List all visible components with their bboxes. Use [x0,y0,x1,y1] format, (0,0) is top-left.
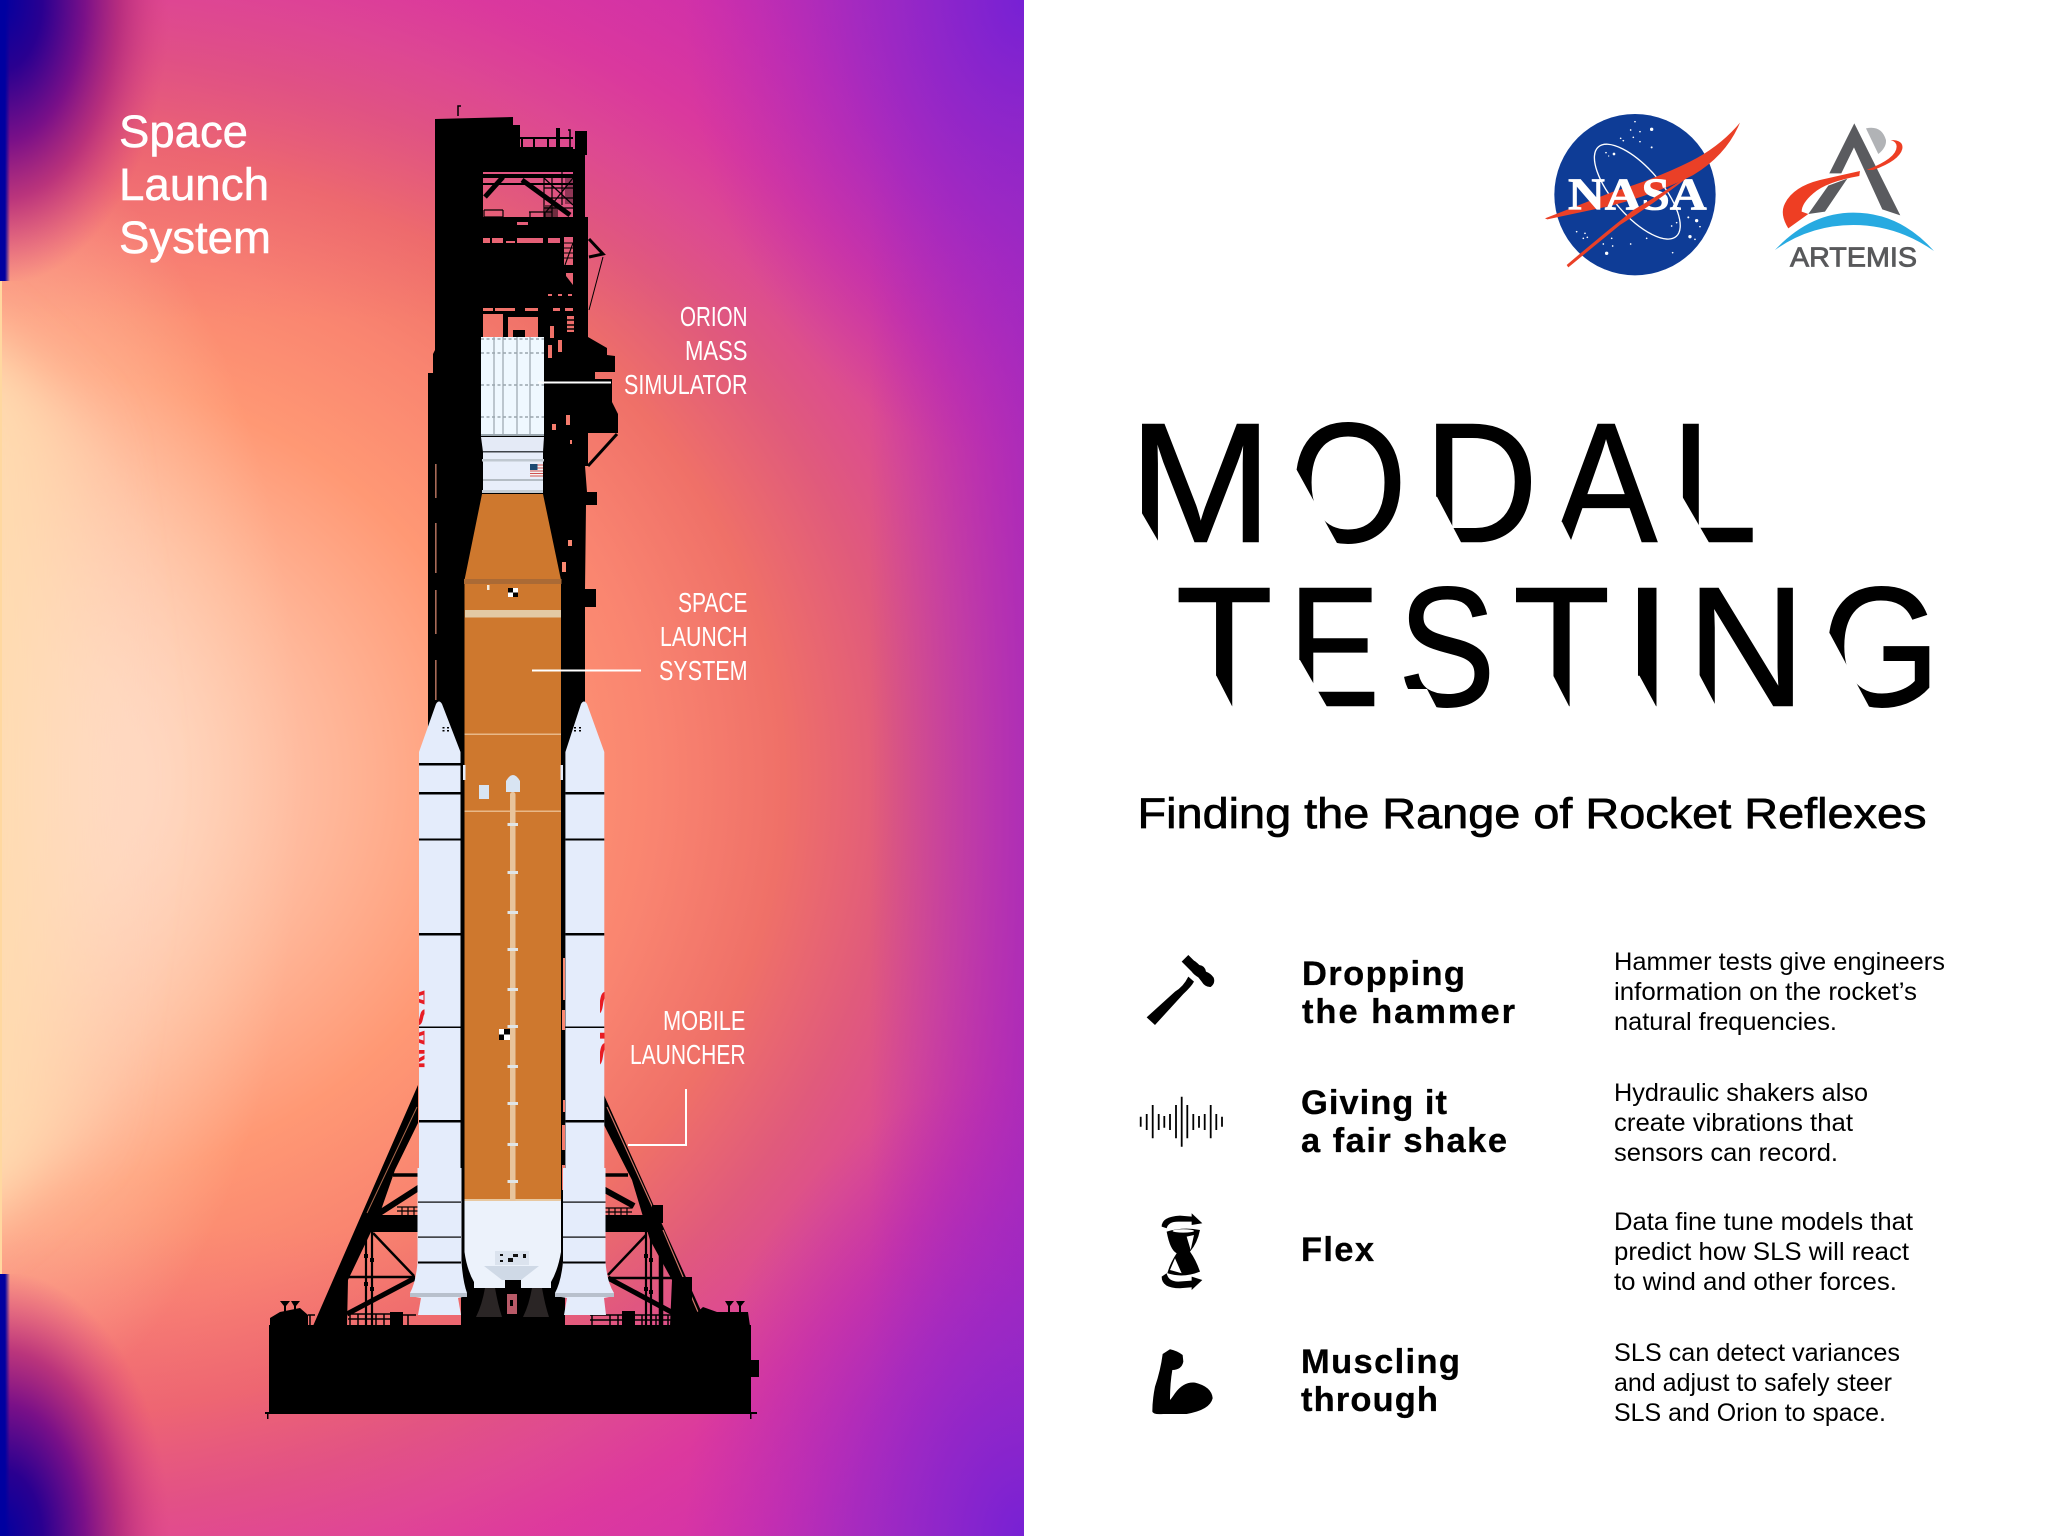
label: Mobile launcher: LAUNCHER [630,1039,746,1070]
text: hammer tests: Hammer tests give engineers [1614,948,1945,976]
icon: flexed arm [1152,1349,1213,1414]
title: TESTING: T [1513,551,1610,742]
text: SLS can detect: and adjust to safely steer [1614,1369,1892,1397]
heading: Space Launch System: System [119,212,271,263]
text: hydraulic shakers: Hydraulic shakers also [1614,1079,1868,1107]
US flag [530,464,543,477]
text: SLS can detect: SLS can detect variances [1614,1339,1900,1367]
icon: hammer [1147,955,1214,1025]
heading: Muscling through [1301,1343,1460,1419]
heading: Space Launch System [119,106,271,263]
heading: Muscling through: through [1301,1381,1438,1419]
title: TESTING: E [1289,552,1380,742]
subtitle: Finding the Range of Rocket Reflexes [1138,790,1926,838]
title: MODAL: L [1671,389,1757,578]
icon: twisting hourglass [1162,1213,1202,1290]
logo: Artemis: ARTEMIS [1790,242,1917,273]
rocket: left solid booster [406,702,467,1315]
heading: Flex: Flex [1301,1231,1374,1269]
title: MODAL: A [1555,388,1657,578]
logo: Artemis [1775,123,1934,273]
title: TESTING: N [1687,553,1805,742]
label: Space Launch System: SYSTEM [659,655,748,686]
icon: sound wave [1141,1097,1222,1147]
title cuts: TESTING [1200,633,1873,714]
label: Space Launch System: SPACE [678,587,748,618]
title cuts: MODAL [1135,470,1711,546]
logo: NASA [1545,114,1740,275]
text: hammer tests: information on the rocket’s [1614,978,1917,1006]
label: Orion mass simulator: SIMULATOR [624,369,748,400]
booster lettering: NASA [406,987,439,1069]
label: Space Launch System [532,587,748,686]
launcher base platform [265,1270,759,1419]
rocket: core stage [463,494,563,1317]
heading: Dropping the hammer: the hammer [1302,993,1515,1031]
heading: Dropping the hammer: Dropping [1302,955,1465,993]
title: TESTING: G [1822,553,1940,742]
title: MODAL: D [1424,388,1538,578]
title: MODAL [1129,388,1757,579]
heading: Dropping the hammer [1302,955,1515,1031]
title: TESTING [1176,551,1940,742]
title: MODAL: M [1129,388,1272,578]
label: Mobile launcher [628,1005,746,1145]
booster lettering: SLS [586,990,619,1068]
heading: Space Launch System: Space [119,106,248,157]
launcher truss right [603,1095,706,1326]
text: hammer tests: natural frequencies. [1614,1008,1837,1036]
heading: Muscling through: Muscling [1301,1343,1460,1381]
label: Mobile launcher: MOBILE [663,1005,746,1036]
text: data fine tune: predict how SLS will react [1614,1238,1909,1266]
heading: Giving it a fair shake: a fair shake [1301,1122,1507,1160]
logo: NASA: NASA [1568,170,1707,220]
text: hydraulic shakers: create vibrations that [1614,1109,1853,1137]
text: hammer tests [1614,948,1945,1036]
text: SLS can detect: SLS and Orion to space. [1614,1399,1886,1427]
text: data fine tune: Data fine tune models that [1614,1208,1913,1236]
text: hydraulic shakers [1614,1079,1868,1167]
title: TESTING: I [1622,552,1672,742]
heading: Giving it a fair shake [1301,1084,1507,1160]
text: SLS can detect [1614,1339,1900,1427]
text: data fine tune: to wind and other forces. [1614,1268,1897,1296]
label: Orion mass simulator: MASS [685,335,748,366]
label: Orion mass simulator: ORION [680,301,748,332]
label: Space Launch System: LAUNCH [660,621,748,652]
heading: Giving it a fair shake: Giving it [1301,1084,1448,1122]
rocket: upper stage and Orion mass simulator [481,337,544,493]
mobile launcher tower silhouette [428,106,618,1280]
heading: Space Launch System: Launch [119,159,269,210]
title: TESTING: S [1398,552,1495,742]
feedline [506,775,520,1232]
label: Orion mass simulator [538,301,748,400]
title: MODAL: O [1289,388,1407,579]
text: data fine tune [1614,1208,1913,1296]
title: TESTING: T [1176,551,1273,742]
panel: gradient background with rocket [0,0,1024,1536]
rocket: right solid booster [555,702,619,1315]
text: hydraulic shakers: sensors can record. [1614,1139,1838,1167]
checker marks [499,588,518,1040]
engine section [464,1201,561,1317]
launcher truss left [313,1085,420,1326]
